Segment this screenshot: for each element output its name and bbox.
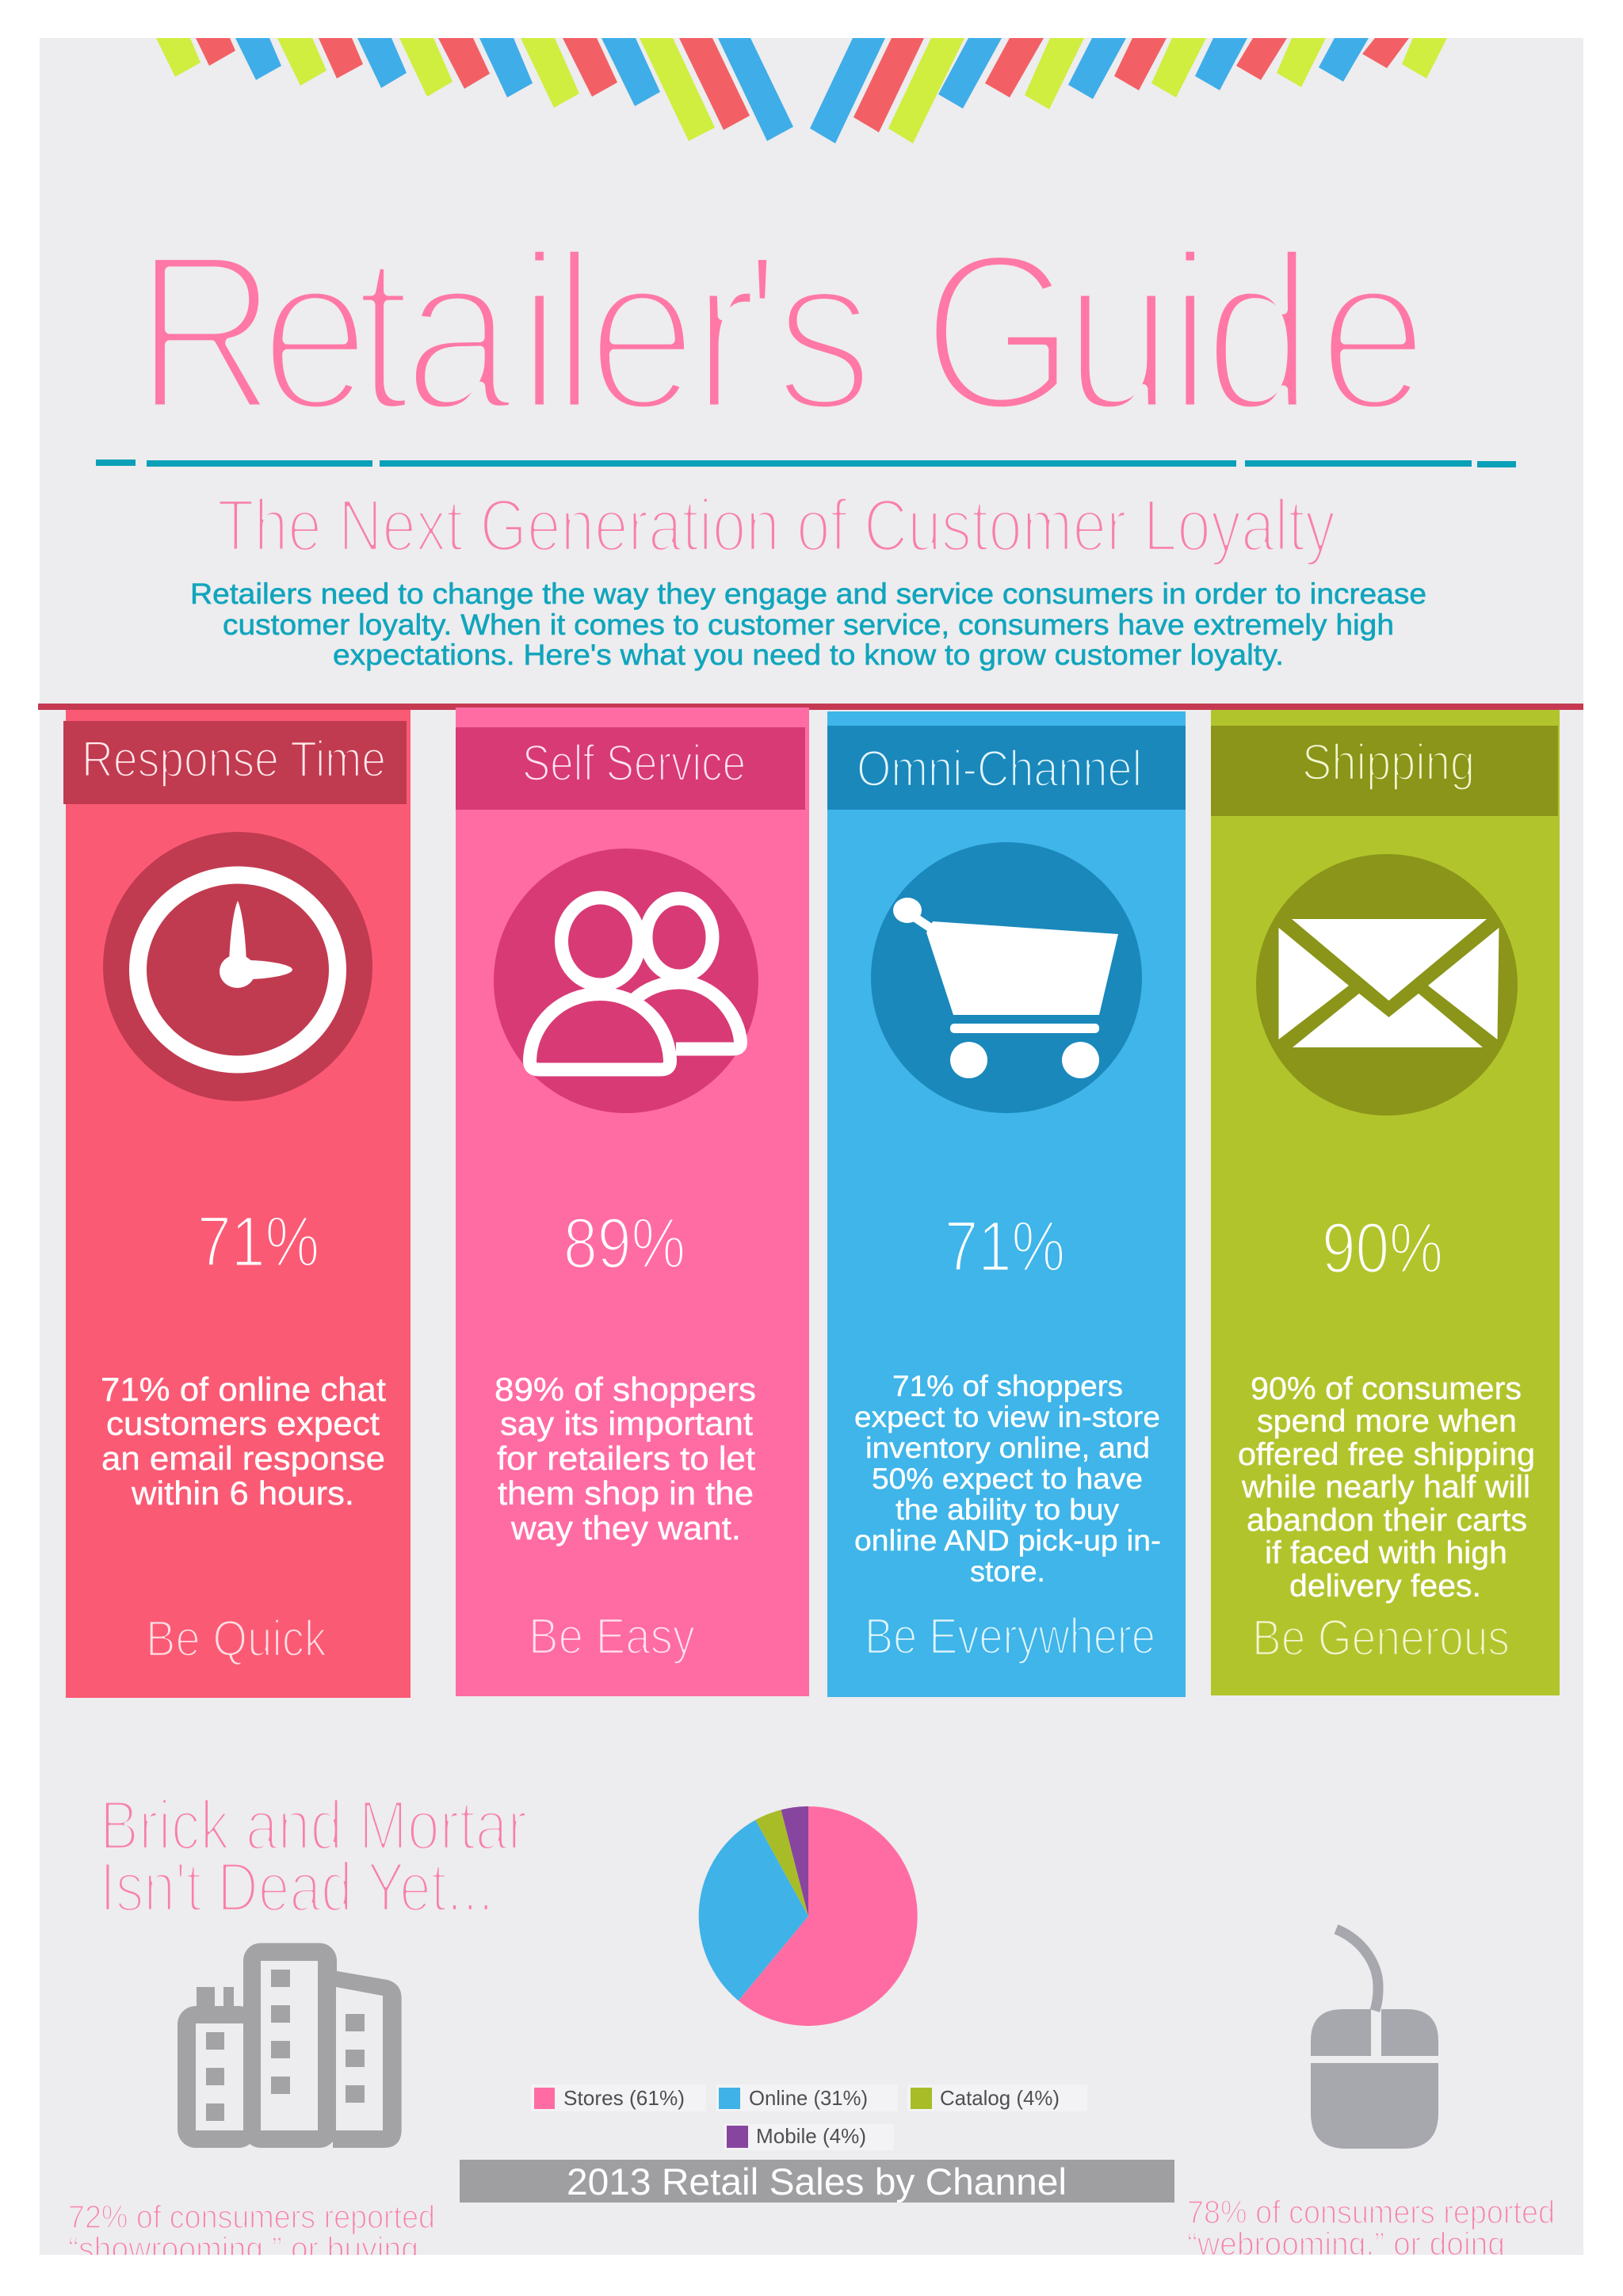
- omni-channel description: [854, 1370, 1161, 1588]
- intro paragraph: [190, 578, 1426, 671]
- webrooming note: “webrooming,” or doing: [1187, 2225, 1505, 2262]
- response time tagline: Be Quick: [146, 1610, 327, 1667]
- brick and mortar heading: Isn't Dead Yet...: [100, 1848, 494, 1926]
- webrooming note: [1187, 2194, 1555, 2262]
- bunting ribbons: [156, 38, 1447, 143]
- shipping description: abandon their carts: [1247, 1503, 1527, 1538]
- omni-channel heading: Omni-Channel: [857, 740, 1142, 797]
- shipping description: delivery fees.: [1289, 1569, 1481, 1604]
- showrooming note: “showrooming,” or buying: [68, 2230, 418, 2267]
- pie legend: Catalog (4%): [940, 2086, 1060, 2110]
- pie legend: Mobile (4%): [756, 2124, 866, 2148]
- shipping description: 90% of consumers: [1251, 1371, 1522, 1406]
- subtitle: The Next Generation of Customer Loyalty: [217, 484, 1335, 566]
- self service tagline: Be Easy: [529, 1608, 695, 1665]
- response time description: [101, 1371, 386, 1512]
- response time header: [63, 721, 407, 804]
- omni-channel header: [827, 726, 1186, 810]
- omni-channel description: the ability to buy: [896, 1493, 1120, 1526]
- response time description: customers expect: [106, 1405, 380, 1442]
- intro paragraph: Retailers need to change the way they engage and service consumers in order to increase: [190, 578, 1426, 610]
- shipping tagline: Be Generous: [1252, 1609, 1510, 1666]
- panel: response time: [63, 710, 411, 1698]
- response time heading: Response Time: [82, 730, 386, 788]
- self service description: way they want.: [510, 1509, 741, 1547]
- intro paragraph: expectations. Here's what you need to know to grow customer loyalty.: [333, 639, 1284, 671]
- shipping stat: 90%: [1322, 1209, 1443, 1288]
- webrooming note: 78% of consumers reported: [1187, 2194, 1555, 2230]
- self service description: say its important: [500, 1405, 753, 1442]
- response time stat: 71%: [197, 1203, 319, 1282]
- shipping header: [1211, 726, 1558, 816]
- self service description: for retailers to let: [497, 1440, 755, 1477]
- self service description: them shop in the: [498, 1474, 754, 1512]
- brick and mortar heading: [100, 1786, 527, 1926]
- icon: clock: [103, 832, 372, 1101]
- icon: people: [494, 849, 758, 1113]
- shipping description: if faced with high: [1265, 1535, 1507, 1570]
- response time description: within 6 hours.: [131, 1474, 354, 1512]
- pie legend: [531, 2084, 1087, 2150]
- icon: shopping cart: [871, 842, 1142, 1113]
- showrooming note: [68, 2199, 435, 2267]
- shipping description: while nearly half will: [1241, 1470, 1530, 1505]
- shipping heading: Shipping: [1302, 734, 1475, 791]
- omni-channel description: expect to view in-store: [854, 1401, 1160, 1433]
- self service description: 89% of shoppers: [495, 1371, 756, 1408]
- omni-channel description: 71% of shoppers: [892, 1370, 1123, 1402]
- self service header: [456, 727, 805, 810]
- shipping description: [1238, 1371, 1535, 1604]
- panel: omni-channel: [827, 711, 1186, 1697]
- response time description: an email response: [101, 1440, 385, 1477]
- title divider: [96, 460, 1516, 467]
- icon: computer mouse: [1311, 1929, 1438, 2149]
- omni-channel tagline: Be Everywhere: [865, 1608, 1155, 1665]
- omni-channel description: online AND pick-up in-: [854, 1524, 1161, 1557]
- response time description: 71% of online chat: [101, 1371, 386, 1408]
- omni-channel description: store.: [970, 1555, 1045, 1588]
- intro paragraph: customer loyalty. When it comes to customer service, consumers have extremely high: [223, 608, 1394, 641]
- section rule: [38, 704, 1583, 710]
- self service description: [495, 1371, 756, 1547]
- pie legend: Stores (61%): [563, 2086, 685, 2110]
- omni-channel stat: 71%: [945, 1207, 1065, 1287]
- showrooming note: 72% of consumers reported: [68, 2199, 435, 2235]
- bottom page margin: [0, 2255, 1623, 2296]
- self service heading: Self Service: [522, 734, 746, 791]
- chart caption bar: 2013 Retail Sales by Channel: [567, 2161, 1067, 2203]
- shipping description: spend more when: [1257, 1404, 1517, 1439]
- omni-channel description: 50% expect to have: [872, 1463, 1143, 1495]
- brick and mortar heading: Brick and Mortar: [100, 1786, 527, 1864]
- panel: shipping: [1211, 710, 1560, 1695]
- chart caption bar: [460, 2160, 1174, 2203]
- omni-channel description: inventory online, and: [865, 1432, 1150, 1464]
- shipping description: offered free shipping: [1238, 1437, 1535, 1472]
- title: Retailer's Guide: [135, 206, 1428, 458]
- self service stat: 89%: [563, 1204, 685, 1283]
- icon: envelope: [1256, 854, 1518, 1116]
- pie legend: Online (31%): [749, 2086, 868, 2110]
- icon: buildings: [178, 1943, 402, 2148]
- pie chart: 2013 retail sales: [699, 1806, 918, 2026]
- panel: self service: [456, 707, 809, 1696]
